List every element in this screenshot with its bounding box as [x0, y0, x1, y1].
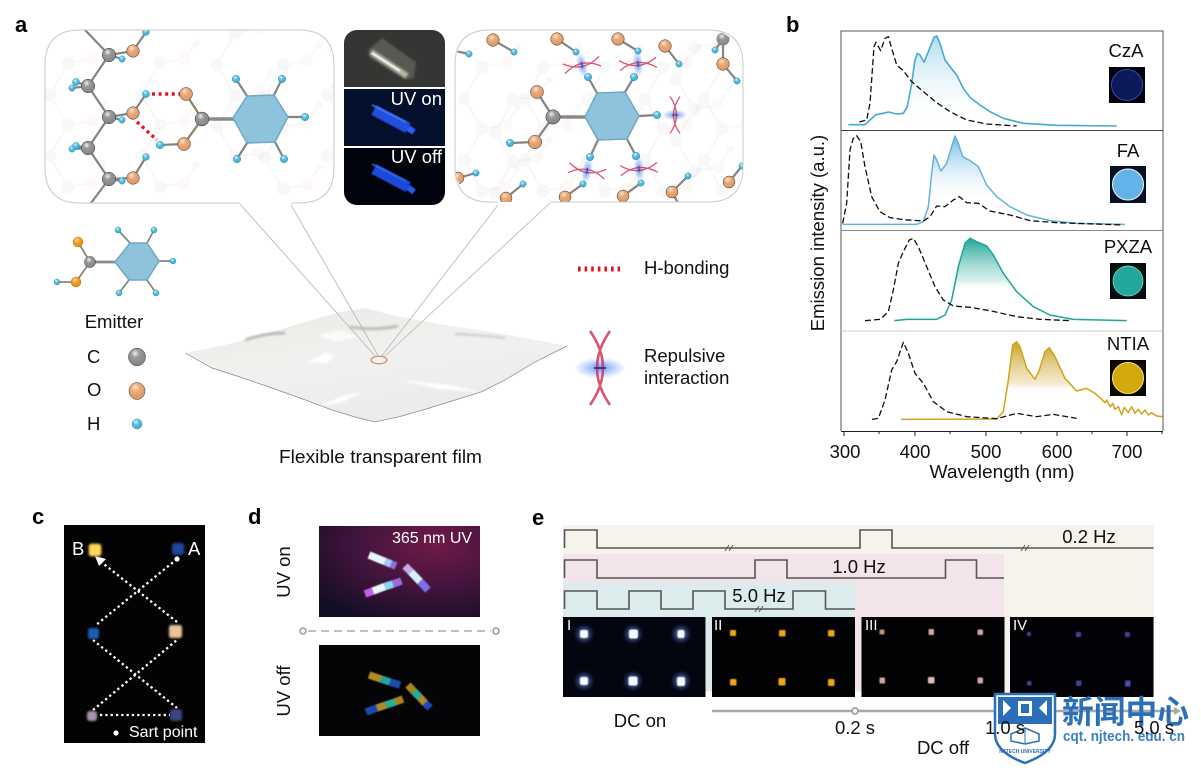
legend: start point: Sart point [129, 724, 198, 741]
emitter label: Emitter [85, 311, 143, 332]
emitter molecule [54, 227, 176, 296]
x axis tick labels: 300 [830, 441, 860, 462]
legend: repulsive interaction [574, 331, 729, 405]
panel label a: a [15, 12, 28, 37]
sample: NTIA [1107, 333, 1150, 396]
watermark logo [995, 694, 1189, 763]
sample: CzA: CzA [1109, 40, 1144, 61]
waveform: 0.2 Hz: 0.2 Hz [1062, 526, 1116, 547]
y axis title: Emission intensity (a.u.) [807, 135, 828, 331]
waveform: 5.0 Hz: 5.0 Hz [732, 585, 786, 606]
plot frame and dividers [841, 31, 1163, 436]
image IV [1010, 617, 1154, 697]
UV off label: UV off [273, 665, 294, 717]
x axis tick labels: 700 [1112, 441, 1142, 462]
legend: repulsive interaction: interaction [644, 367, 729, 388]
sample: FA [1110, 140, 1146, 203]
waveform: 1.0 Hz: 1.0 Hz [832, 556, 886, 577]
panel c [32, 504, 205, 743]
DC on label: DC on [614, 710, 666, 731]
film caption: Flexible transparent film [279, 446, 482, 467]
sample: PXZA: PXZA [1104, 236, 1153, 257]
dotted path [93, 559, 177, 715]
x axis tick labels [830, 441, 1142, 462]
panel a [15, 10, 762, 467]
legend: H-bonding: H-bonding [644, 257, 729, 278]
labels B and A [72, 538, 201, 559]
labels B and A: A [188, 538, 201, 559]
waveform: 1.0 Hz [564, 556, 1004, 578]
image II [712, 617, 855, 697]
UV on label: UV on [273, 546, 294, 598]
label: UV off: UV off [391, 146, 443, 167]
legend: atoms [87, 346, 146, 434]
sample: FA: FA [1117, 140, 1140, 161]
time labels over logo: 0.2 s [835, 717, 875, 738]
image IV: IV [1013, 617, 1027, 634]
spectra: PXZA [865, 238, 1127, 321]
legend: hydrogen: H [87, 413, 100, 434]
emitting squares [87, 543, 184, 721]
spectra: CzA [848, 36, 1117, 126]
image III: III [865, 617, 878, 634]
frequency background bands [563, 525, 1154, 692]
callout: H-bonding molecular view [44, 30, 334, 204]
start dot [174, 556, 180, 562]
labels B and A: B [72, 538, 84, 559]
panel e [532, 505, 1181, 758]
callout leader lines [240, 203, 550, 357]
time labels over logo: 1.0 s [985, 717, 1025, 738]
panel label e: e [532, 505, 544, 530]
image I [563, 617, 706, 697]
legend: carbon: C [87, 346, 100, 367]
time labels over logo [835, 717, 1174, 738]
waveform: 5.0 Hz [564, 585, 855, 612]
photo strip: UV on and off [344, 30, 445, 205]
image I: I [567, 617, 571, 634]
zoom marker ellipse [371, 356, 387, 364]
arrow head [95, 556, 106, 566]
shield emblem: NJTECH UNIVERSITY [999, 749, 1051, 755]
x axis tick labels: 600 [1042, 441, 1072, 462]
sample: NTIA: NTIA [1107, 333, 1150, 354]
logo URL: cqt. njtech. edu. cn [1063, 728, 1185, 745]
spectra: FA [843, 136, 1125, 225]
logo title: 新闻中心 [1062, 694, 1189, 730]
image II: II [714, 617, 722, 634]
x axis tick labels: 400 [900, 441, 930, 462]
photo: UV on [319, 526, 480, 617]
shield emblem [995, 694, 1055, 763]
panel label d: d [248, 504, 261, 529]
legend: oxygen: O [87, 379, 101, 400]
panel b [786, 12, 1163, 482]
label: UV on: UV on [391, 88, 442, 109]
flexible transparent film [185, 308, 567, 422]
sample: PXZA [1104, 236, 1153, 299]
sample: CzA [1109, 40, 1145, 103]
image III [862, 617, 1004, 697]
timeline arrow [712, 707, 1181, 715]
photo: UV off [319, 645, 480, 736]
panel d [248, 504, 499, 736]
x axis title: Wavelength (nm) [930, 461, 1074, 482]
panel label c: c [32, 504, 44, 529]
panel label b: b [786, 12, 799, 37]
callout: repulsive interaction molecular view [454, 30, 744, 202]
legend: repulsive interaction: Repulsive [644, 345, 725, 366]
x axis tick labels: 500 [971, 441, 1001, 462]
photo: UV on: 365 nm UV [392, 530, 472, 547]
time labels over logo: 5.0 s [1134, 717, 1174, 738]
spectra: NTIA [872, 342, 1162, 419]
divider [300, 628, 499, 634]
DC off label: DC off [917, 737, 970, 758]
waveform: 0.2 Hz [564, 526, 1154, 551]
photo background [64, 525, 205, 743]
